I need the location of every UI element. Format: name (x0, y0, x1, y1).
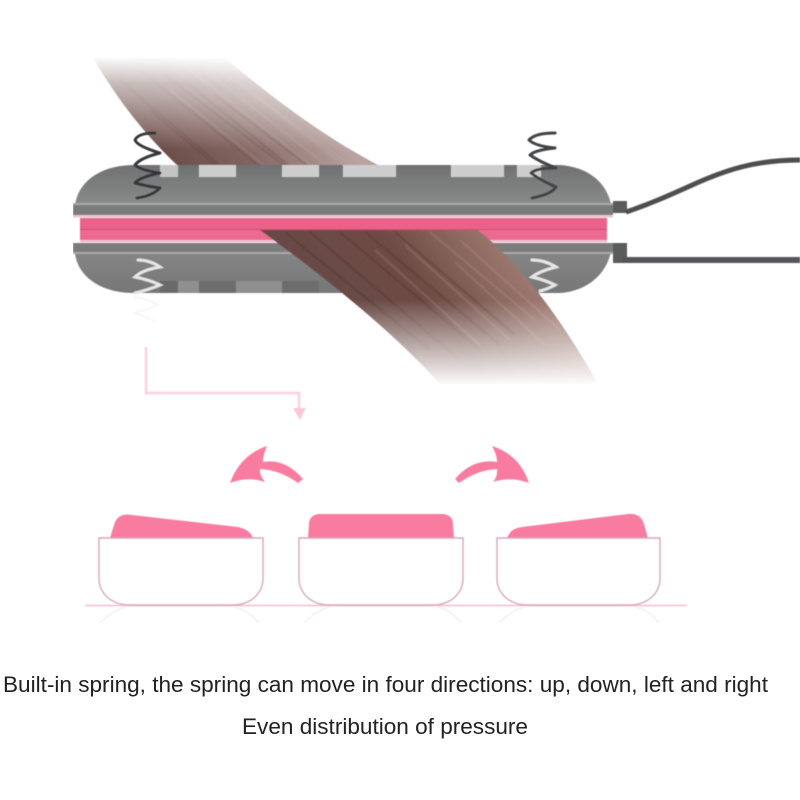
spring: top right (529, 133, 556, 198)
illustration (73, 54, 800, 623)
lower blocks (160, 281, 319, 293)
caption: line 1: Built-in spring, the spring can move in four directions: up, down, left and right (3, 672, 768, 697)
upper ceramic blocks (160, 165, 541, 177)
plate diagram: tilted left (99, 514, 263, 605)
white housing (497, 538, 660, 605)
pink plate (507, 514, 648, 538)
lower rim (73, 243, 613, 254)
spring: top left (135, 133, 160, 198)
connector: top (613, 201, 627, 213)
power cable: top (626, 160, 800, 212)
pointer line and arrow (146, 347, 306, 420)
power cable: bottom (622, 257, 800, 263)
curved arrow: right (455, 446, 529, 483)
curved arrow: left (230, 446, 303, 483)
spring: bottom left (white) (135, 260, 160, 322)
hair strand: upper section (95, 60, 378, 166)
plate diagram: tilted right (497, 514, 660, 605)
plate diagram: level (299, 514, 463, 605)
hair straightener: lower plate (73, 243, 613, 293)
white housing (99, 538, 263, 605)
pink plate (110, 514, 253, 538)
hair straightener: upper plate (73, 165, 613, 218)
spring: bottom right (white) (532, 260, 556, 291)
baseline (85, 604, 687, 606)
reflections (100, 607, 659, 623)
caption: line 2: Even distribution of pressure (242, 714, 528, 739)
heating plate: pink (80, 218, 607, 242)
connector: bottom (613, 243, 627, 263)
lower housing (75, 252, 611, 293)
upper housing (75, 165, 611, 206)
upper rim (73, 203, 613, 218)
pink plate (308, 514, 454, 538)
hair strand: lower section (260, 230, 596, 382)
white housing (299, 538, 463, 605)
